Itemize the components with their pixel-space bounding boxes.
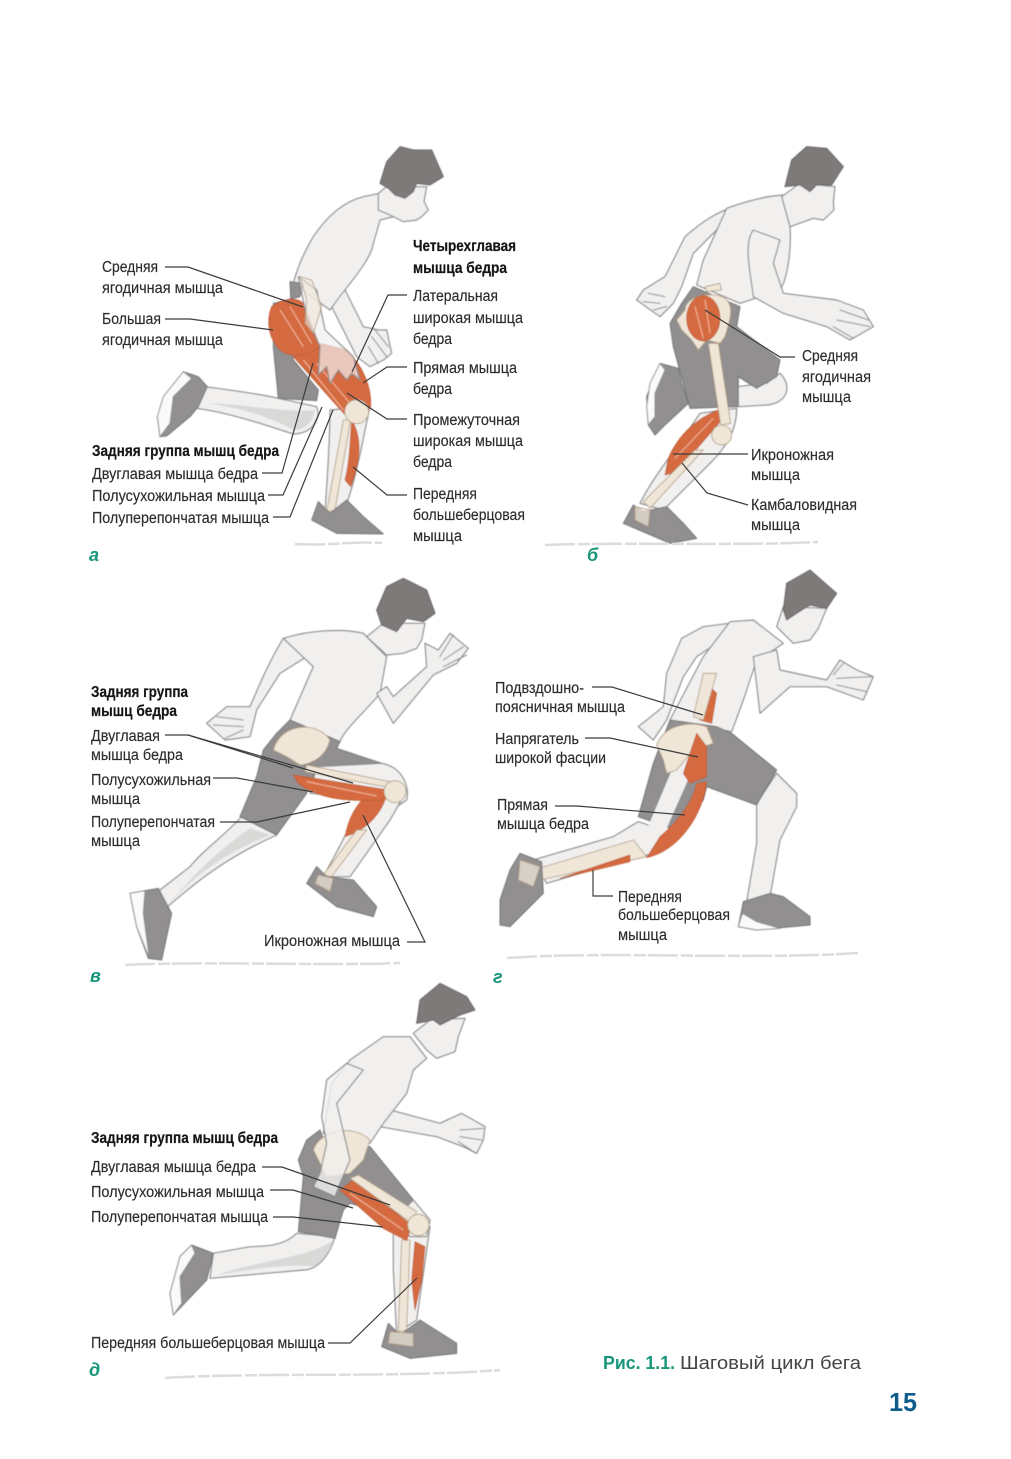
page number: 15 xyxy=(889,1387,917,1417)
leader lines v xyxy=(165,735,425,942)
labels g: мышца xyxy=(618,927,667,944)
labels a, left: Средняя xyxy=(102,259,158,276)
labels a, right: Промежуточная xyxy=(413,412,520,429)
labels d xyxy=(91,1130,325,1352)
leader lines g xyxy=(555,687,703,896)
labels b: мышца xyxy=(751,467,800,484)
labels d: Задняя группа мышц бедра xyxy=(91,1130,278,1147)
caption: Рис. 1.1. xyxy=(603,1353,675,1373)
labels v: мышца бедра xyxy=(91,747,183,764)
labels a, left: Двуглавая мышца бедра xyxy=(92,466,258,483)
labels a, right xyxy=(413,238,525,545)
labels a, right: бедра xyxy=(413,454,452,471)
labels v: мышца xyxy=(91,833,140,850)
labels a, right: широкая мышца xyxy=(413,433,523,450)
labels a, left xyxy=(92,259,279,527)
figure letter v: в xyxy=(90,966,101,986)
caption xyxy=(603,1353,862,1373)
labels v: Икроножная мышца xyxy=(264,933,400,950)
ground line g xyxy=(507,953,858,958)
labels a, right: бедра xyxy=(413,381,452,398)
ground line a xyxy=(295,543,382,544)
labels b: Икроножная xyxy=(751,447,834,464)
labels a, left: Задняя группа мышц бедра xyxy=(92,443,279,460)
labels g: поясничная мышца xyxy=(495,699,625,716)
labels g: широкой фасции xyxy=(495,750,606,767)
labels b: Камбаловидная xyxy=(751,497,857,514)
leader lines a xyxy=(165,267,407,517)
labels b xyxy=(751,348,871,534)
labels d: Полуперепончатая мышца xyxy=(91,1209,268,1226)
runner illustration a xyxy=(157,147,443,534)
runner illustration v xyxy=(130,578,468,960)
figure d: runner with hamstrings and tibialis anterior xyxy=(89,983,500,1380)
labels v: Задняя группа xyxy=(91,684,188,701)
labels v: Двуглавая xyxy=(91,728,160,745)
figure b: runner with gluteus medius and calf muscles xyxy=(545,147,873,565)
labels d: Передняя большеберцовая мышца xyxy=(91,1335,325,1352)
figure letter d: д xyxy=(89,1360,100,1380)
labels a, right: широкая мышца xyxy=(413,310,523,327)
labels a, right: Латеральная xyxy=(413,288,498,305)
labels a, right: мышца xyxy=(413,528,462,545)
figure letter a: а xyxy=(89,545,99,565)
labels d: Двуглавая мышца бедра xyxy=(91,1159,256,1176)
figure letter g: г xyxy=(493,967,503,987)
labels d: Полусухожильная мышца xyxy=(91,1184,264,1201)
labels g: Напрягатель xyxy=(495,731,579,748)
leader lines b xyxy=(673,310,795,505)
labels v: мышца xyxy=(91,791,140,808)
labels a, left: Большая xyxy=(102,311,161,328)
figure a: runner with quadriceps and gluteal muscles xyxy=(89,147,525,565)
labels b: ягодичная xyxy=(802,369,871,386)
labels b: мышца xyxy=(802,389,851,406)
labels a, left: Полуперепончатая мышца xyxy=(92,510,269,527)
labels g: большеберцовая xyxy=(618,907,730,924)
figure v: runner with hamstrings xyxy=(90,578,468,986)
labels a, right: Передняя xyxy=(413,486,477,503)
labels a, right: Прямая мышца xyxy=(413,360,517,377)
runner illustration g xyxy=(500,570,873,930)
labels b: Средняя xyxy=(802,348,858,365)
labels a, right: Четырехглавая xyxy=(413,238,516,255)
figure letter b: б xyxy=(587,545,599,565)
runner illustration d xyxy=(170,983,485,1358)
ground line b xyxy=(545,542,818,545)
labels a, left: ягодичная мышца xyxy=(102,280,223,297)
ground line v xyxy=(125,963,400,965)
ground line d xyxy=(165,1370,500,1378)
labels a, left: Полусухожильная мышца xyxy=(92,488,265,505)
labels a, left: ягодичная мышца xyxy=(102,332,223,349)
labels g: мышца бедра xyxy=(497,816,589,833)
labels a, right: большеберцовая xyxy=(413,507,525,524)
labels g xyxy=(495,680,730,944)
figure g: runner with hip flexors xyxy=(493,570,873,987)
labels v xyxy=(91,684,400,950)
labels g: Подвздошно- xyxy=(495,680,584,697)
caption: Шаговый цикл бега xyxy=(680,1353,862,1373)
labels a, right: бедра xyxy=(413,331,452,348)
labels v: Полусухожильная xyxy=(91,772,211,789)
labels g: Прямая xyxy=(497,797,548,814)
labels v: мышц бедра xyxy=(91,703,177,720)
leader lines d xyxy=(262,1167,417,1343)
labels v: Полуперепончатая xyxy=(91,814,215,831)
labels g: Передняя xyxy=(618,889,682,906)
runner illustration b xyxy=(623,147,873,543)
labels b: мышца xyxy=(751,517,800,534)
labels a, right: мышца бедра xyxy=(413,260,507,277)
